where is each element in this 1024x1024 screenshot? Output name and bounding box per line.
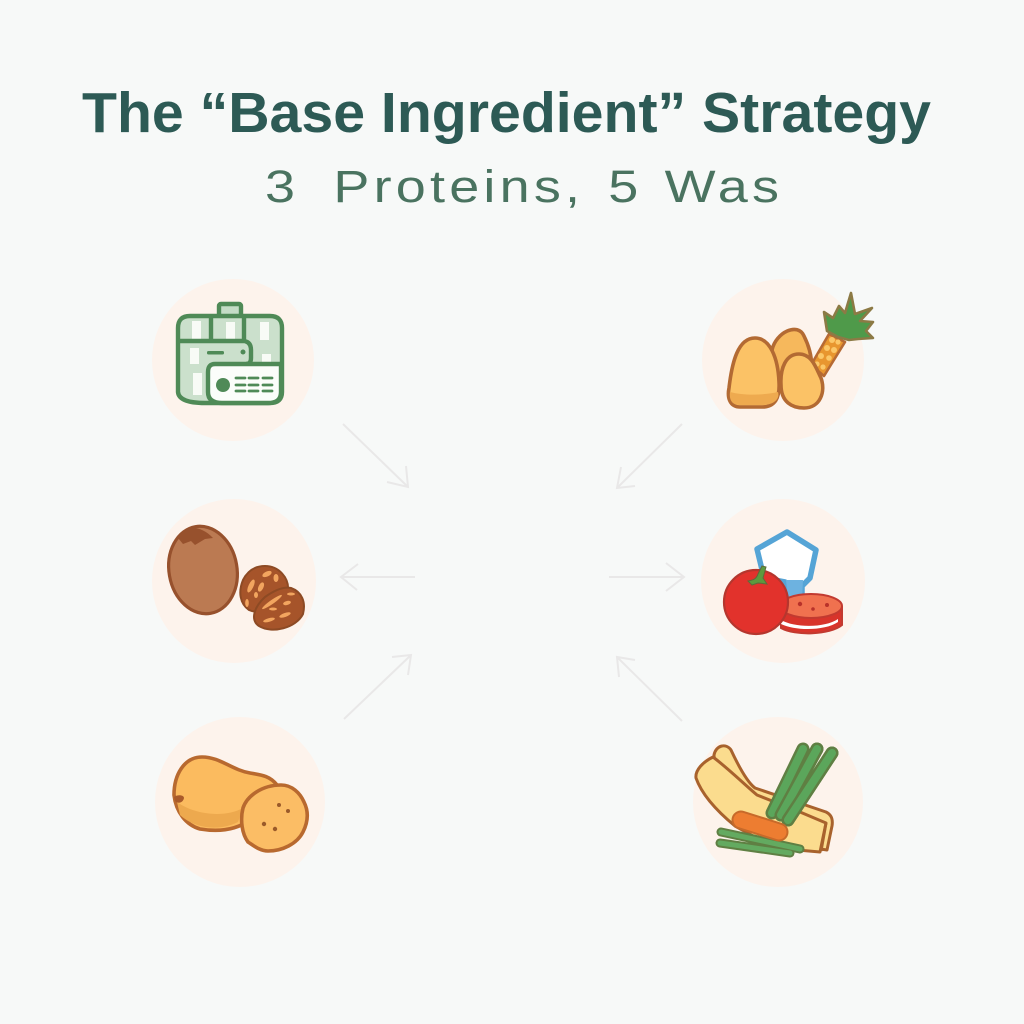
arrow: bottom-left to centre: [344, 655, 411, 719]
icon: sweet potato whole: [174, 757, 277, 830]
icon: blue badge: [757, 532, 816, 600]
panel: vegetables and bread: [693, 717, 863, 887]
arrow: top-left to centre: [343, 424, 408, 487]
panel: mango and pineapple: [702, 279, 873, 441]
icon: walnuts: [240, 566, 304, 630]
icon: carrot: [741, 820, 779, 832]
subtitle: 5: [608, 161, 642, 212]
icon: pineapple: [811, 293, 873, 376]
subtitle: Proteins,: [333, 161, 584, 212]
panel: meal prep container: [152, 279, 314, 441]
arrow: bottom-right to centre: [617, 657, 682, 721]
arrow: centre to right: [609, 563, 684, 591]
icon: green beans: [772, 749, 832, 820]
arrow: centre to left: [341, 564, 415, 590]
icon: patty: [780, 594, 842, 633]
arrow: top-right to centre: [617, 424, 682, 488]
icon: bread: [696, 746, 832, 852]
panel: sweet potato: [155, 717, 325, 887]
icon: mangoes: [728, 329, 823, 408]
panel: tomato, salt and burger patty: [701, 499, 865, 663]
title: The “Base Ingredient” Strategy: [82, 81, 931, 145]
icon: sweet potato slice: [242, 785, 307, 851]
subtitle: Was: [665, 161, 783, 212]
icon: container: [178, 304, 282, 403]
icon: beans under carrot: [720, 832, 800, 853]
icon: coconut: [162, 521, 244, 619]
icon: tomato: [724, 570, 788, 634]
subtitle: 3: [265, 161, 299, 212]
panel: nuts: [152, 499, 316, 663]
